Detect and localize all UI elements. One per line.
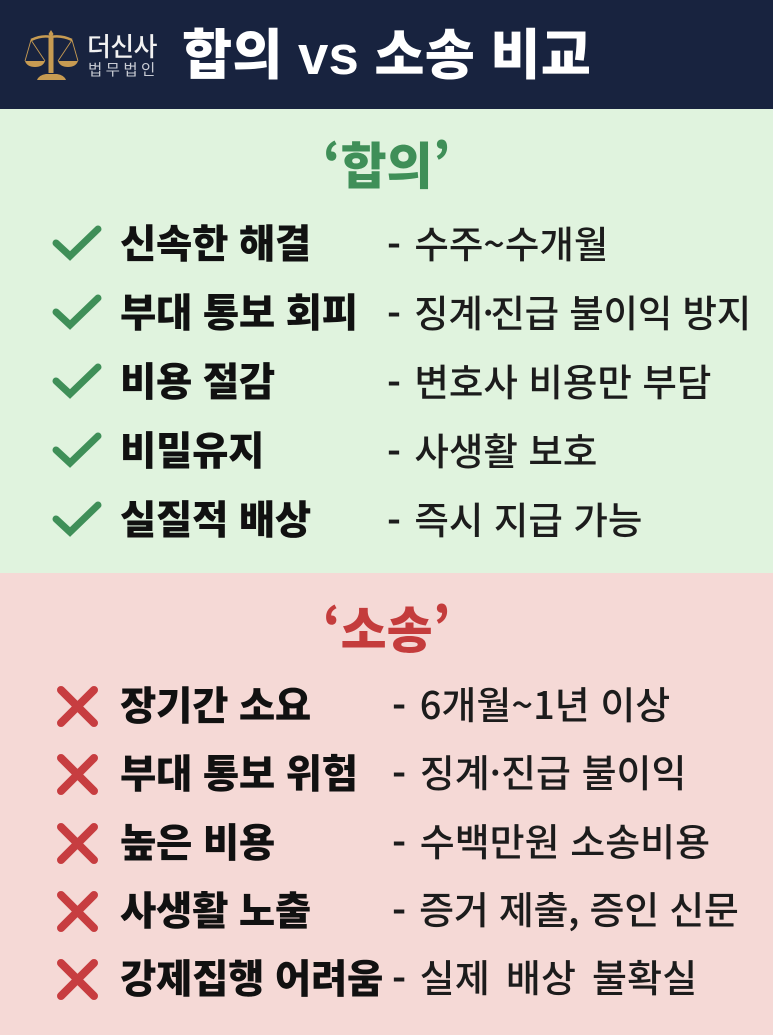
icon: cross — [57, 959, 98, 1000]
icon: check — [52, 432, 102, 468]
detail: - 징계·진급 불이익 — [392, 743, 686, 800]
panel: settlement — [0, 109, 773, 573]
detail: - 즉시 지급 가능 — [387, 490, 642, 547]
icon: check — [52, 294, 102, 330]
icon: check — [52, 226, 102, 261]
detail: - 변호사 비용만 부담 — [387, 352, 711, 409]
panel: lawsuit — [0, 573, 773, 1035]
label: 강제집행 어려움 — [120, 948, 383, 1005]
row 3 — [52, 351, 711, 409]
detail: - 사생활 보호 — [387, 421, 597, 478]
heading: lawsuit: ‘소송’ — [323, 591, 450, 663]
detail: - 수백만원 소송비용 — [392, 812, 710, 869]
icon: gold scales logo — [24, 30, 78, 80]
detail: - 증거 제출, 증인 신문 — [392, 880, 739, 937]
header bar — [0, 0, 773, 109]
row 3 — [57, 812, 710, 869]
label: 부대 통보 위험 — [120, 743, 358, 800]
label: 비용 절감 — [120, 351, 275, 408]
detail: - 실제 배상 불확실 — [392, 948, 697, 1005]
heading: settlement: ‘합의’ — [323, 127, 450, 199]
row 5 — [52, 489, 642, 547]
row 1 — [57, 675, 670, 732]
row 1 — [52, 213, 608, 271]
icon: check — [52, 502, 102, 537]
row 2 — [52, 282, 751, 340]
icon: cross — [57, 823, 98, 864]
label: 높은 비용 — [120, 812, 275, 869]
label: 부대 통보 회피 — [120, 282, 358, 339]
detail: - 6개월~1년 이상 — [392, 675, 670, 732]
detail: - 징계·진급 불이익 방지 — [387, 283, 751, 340]
label: 장기간 소요 — [120, 675, 311, 732]
icon: cross — [57, 686, 98, 727]
logo name: 더신사 — [87, 27, 157, 64]
row 4 — [52, 420, 597, 478]
icon: cross — [57, 754, 98, 795]
logo subtitle: 법무법인 — [88, 58, 159, 80]
row 4 — [57, 880, 739, 937]
icon: check — [52, 364, 102, 399]
label: 사생활 노출 — [120, 880, 311, 937]
label: 실질적 배상 — [120, 489, 311, 546]
label: 비밀유지 — [120, 420, 264, 477]
label: 신속한 해결 — [120, 213, 311, 270]
row 2 — [57, 743, 686, 800]
row 5 — [57, 948, 697, 1005]
title: 합의 vs 소송 비교 — [182, 25, 591, 86]
detail: - 수주~수개월 — [387, 214, 608, 271]
icon: cross — [57, 891, 98, 932]
